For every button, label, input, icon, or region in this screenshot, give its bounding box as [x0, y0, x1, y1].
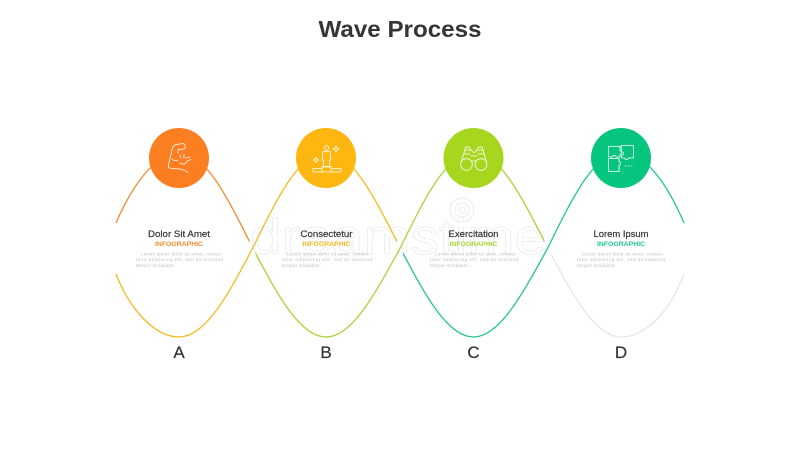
letter A: A	[173, 343, 185, 362]
subheading C: INFOGRAPHIC	[450, 241, 498, 248]
body text C	[430, 252, 518, 268]
step D	[577, 128, 665, 362]
heading A: Dolor Sit Amet	[148, 229, 210, 240]
heading B: Consectetur	[300, 229, 352, 240]
body text D: tempor incididunt.	[577, 263, 616, 268]
wave: teal	[400, 152, 684, 337]
body text D: tetur adipiscing elit, sed do eiusmod	[577, 257, 665, 262]
body text D: Lorem ipsum dolor sit amet, consec-	[582, 252, 664, 256]
body text C: tetur adipiscing elit, sed do eiusmod	[430, 257, 518, 262]
title: Wave Process	[318, 16, 482, 42]
subheading A: INFOGRAPHIC	[155, 241, 203, 248]
icon: person on podium	[313, 146, 341, 172]
wave: green	[253, 152, 548, 337]
body text D	[577, 252, 665, 268]
body text A: tempor incididunt.	[136, 263, 175, 268]
icon: binoculars	[461, 147, 487, 170]
letter D: D	[615, 343, 627, 362]
icon: puzzle	[608, 146, 634, 172]
subheading B: INFOGRAPHIC	[302, 241, 351, 248]
body text B: tempor incididunt.	[282, 263, 321, 268]
body text A: tetur adipiscing elit, sed do eiusmod	[136, 257, 223, 262]
heading C: Exercitation	[448, 229, 498, 240]
wave: yellow	[116, 152, 400, 337]
body text B: Lorem ipsum dolor sit amet, consec-	[287, 252, 370, 256]
body text A: Lorem ipsum dolor sit amet, consec-	[141, 252, 223, 256]
body text A	[136, 252, 223, 268]
wave: orange	[115, 166, 250, 243]
heading D: Lorem Ipsum	[594, 229, 649, 240]
body text C: Lorem ipsum dolor sit amet, consec-	[435, 252, 517, 256]
circle A	[149, 128, 209, 188]
wave: grey	[548, 248, 684, 337]
icon: muscle arm	[168, 144, 191, 172]
step C	[430, 128, 518, 362]
step B	[282, 128, 372, 362]
body text B: tetur adipiscing elit, sed do eiusmod	[282, 257, 372, 262]
body text C: tempor incididunt.	[430, 263, 469, 268]
letter C: C	[467, 343, 480, 362]
watermark: dreamstime	[250, 209, 546, 265]
circle D	[591, 128, 651, 188]
subheading D: INFOGRAPHIC	[597, 241, 645, 248]
circle B	[296, 128, 356, 188]
circle C	[444, 128, 504, 188]
letter B: B	[320, 343, 332, 362]
step A	[136, 128, 223, 362]
body text B	[282, 252, 372, 268]
